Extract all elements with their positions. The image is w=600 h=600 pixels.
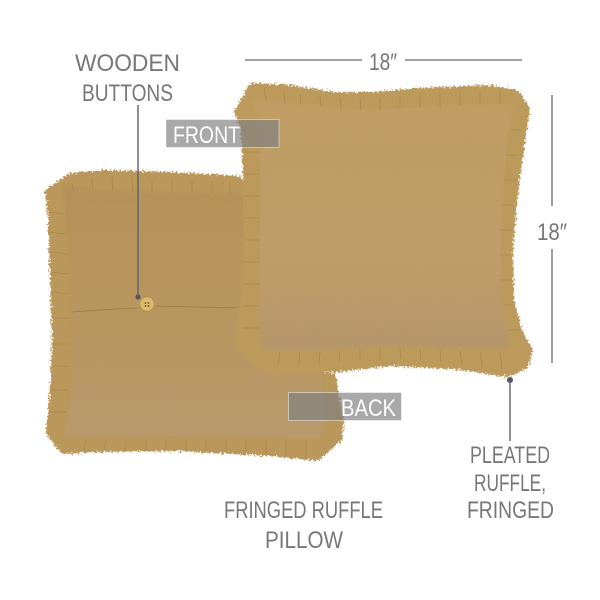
front pillow fringe xyxy=(234,83,533,377)
dimension: width 18 inches: 18″ xyxy=(369,49,397,76)
title: fringed ruffle pillow: FRINGED RUFFLE xyxy=(224,497,383,524)
label: back tag: BACK xyxy=(341,395,397,422)
callout: pleated ruffle, fringed: FRINGED xyxy=(467,497,554,524)
heading: wooden buttons callout: WOODEN xyxy=(75,50,180,77)
back pillow xyxy=(45,170,344,461)
label: front tag: FRONT xyxy=(173,122,240,149)
front pillow xyxy=(234,83,533,377)
heading: wooden buttons callout: BUTTONS xyxy=(82,80,173,107)
back pillow body xyxy=(63,185,326,438)
icon: wooden button xyxy=(140,297,154,311)
back pillow pleats xyxy=(48,176,306,457)
title: fringed ruffle pillow: PILLOW xyxy=(265,527,344,554)
back pillow fringe xyxy=(45,170,344,461)
heading: wooden buttons callout xyxy=(75,50,180,300)
callout: pleated ruffle, fringed xyxy=(467,377,554,524)
front pillow pleats xyxy=(243,88,522,370)
label: back tag xyxy=(288,392,402,422)
front pillow body xyxy=(253,100,513,350)
dimension: height 18 inches: 18″ xyxy=(537,219,567,246)
back pillow flap seam xyxy=(72,306,240,312)
callout: pleated ruffle, fringed: PLEATED xyxy=(470,442,550,469)
callout: pleated ruffle, fringed: RUFFLE, xyxy=(474,470,546,497)
title: fringed ruffle pillow xyxy=(224,497,383,554)
label: front tag xyxy=(166,120,279,149)
